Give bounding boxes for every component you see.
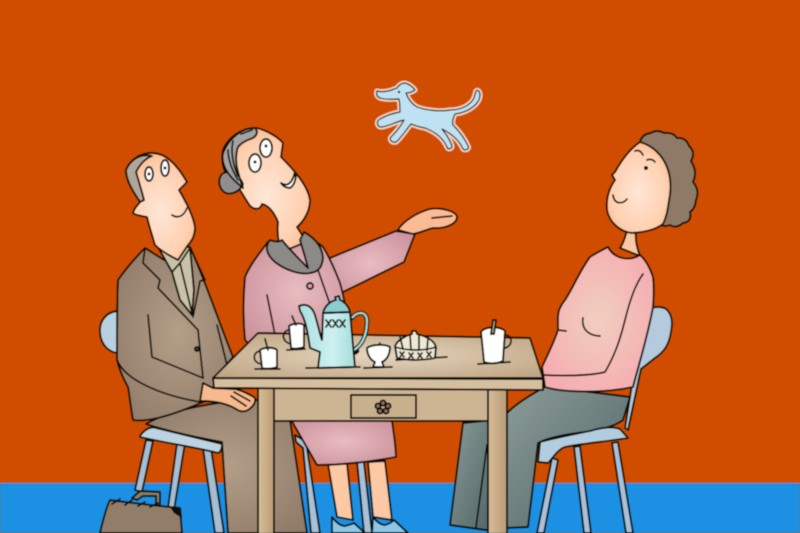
neck [620, 230, 640, 256]
grey collar [267, 232, 323, 273]
apron [274, 388, 488, 421]
trousers [146, 400, 307, 533]
stool [135, 427, 224, 533]
neck and head [222, 128, 310, 252]
skirt [290, 418, 396, 465]
right chair [537, 307, 672, 533]
man's hand [200, 383, 255, 411]
table [213, 333, 543, 533]
left cup [254, 339, 277, 369]
right woman [450, 131, 697, 531]
trousers [450, 420, 493, 531]
shoes [332, 517, 408, 533]
coffee pot [299, 296, 367, 368]
eyes and smile [145, 167, 153, 181]
shadows [255, 349, 510, 369]
arm [325, 231, 415, 296]
sweater [542, 247, 654, 392]
table edge [213, 378, 543, 390]
man on the left [117, 153, 307, 533]
covered dish [395, 331, 436, 360]
right table leg [488, 388, 507, 533]
legs [328, 461, 392, 520]
large cup [481, 320, 511, 363]
hair bun [219, 172, 243, 194]
drawer [351, 395, 416, 418]
eyes [249, 154, 261, 172]
briefcase [100, 491, 182, 533]
table top [213, 333, 543, 378]
back cup [283, 316, 304, 349]
jacket details [117, 247, 227, 402]
floor [0, 483, 800, 533]
chair seat [538, 428, 628, 463]
chair legs [537, 442, 633, 533]
hand [398, 208, 457, 234]
torso [244, 238, 352, 345]
chair back [625, 307, 672, 430]
head [126, 153, 195, 260]
sugar bowl [367, 343, 390, 367]
flying dog [377, 83, 480, 150]
left chair back [100, 311, 119, 353]
hair [640, 131, 697, 227]
button and dress line [307, 283, 313, 289]
shirt [158, 247, 194, 315]
woman in the middle [219, 128, 457, 533]
hair [223, 128, 257, 188]
eyebrow, eye and smile [613, 150, 655, 203]
chair behind [295, 435, 372, 533]
face [607, 142, 671, 233]
jacket [117, 247, 240, 421]
smile [281, 172, 296, 188]
drawer knob [375, 400, 391, 414]
left table leg [258, 388, 274, 533]
hair [126, 155, 152, 202]
tea set [254, 296, 511, 369]
